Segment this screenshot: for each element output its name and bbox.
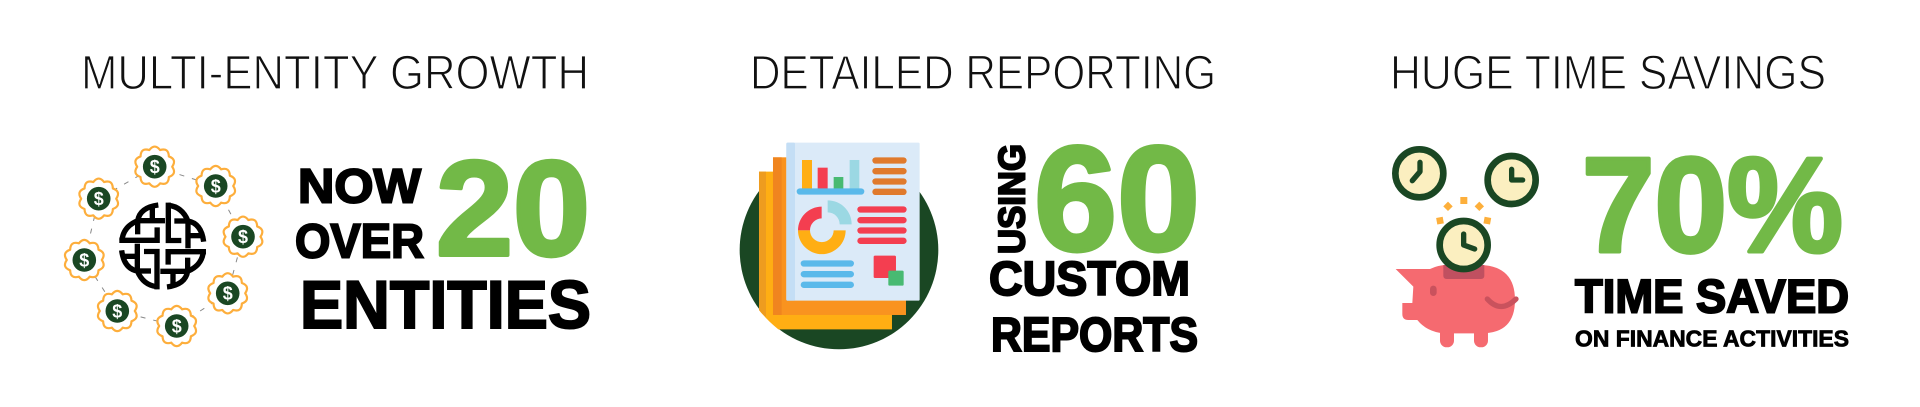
coin 8: $ [94,189,104,209]
text: on finance activities: ON FINANCE ACTIVITIES [1575,326,1849,352]
icon: entity network [59,142,268,351]
coin 2 [191,161,241,211]
coin 4 [203,269,253,318]
coin 1 [130,142,180,191]
coin 7: $ [79,250,89,270]
coin 5 [152,301,202,351]
coin 2: $ [211,176,221,196]
icon: celtic knot [119,203,206,289]
orange text lines [872,157,907,195]
blue text lines [801,260,854,288]
heading: huge time savings: HUGE TIME SAVINGS [1390,47,1826,100]
stat: 70 percent: 70% [1582,130,1843,280]
text: now: NOW [298,160,422,214]
front sheet [786,143,920,301]
text: using: USING [992,144,1032,254]
sparkle marks [1436,197,1491,225]
dashed connections [84,167,243,326]
icon: piggy bank with clocks [1395,149,1536,347]
backdrop circle [740,151,938,349]
red text lines [857,206,907,244]
text: custom: CUSTOM [989,253,1190,306]
donut chart [798,200,852,254]
text: time saved: TIME SAVED [1575,270,1849,322]
clock: top right [1488,156,1536,204]
coin 3 [218,212,268,261]
clock: falling into slot [1440,221,1488,269]
middle sheet [773,157,906,315]
heading: multi-entity growth: MULTI-ENTITY GROWTH [81,47,589,100]
icon: report stack [740,143,938,349]
stat: 20: 20 [436,133,590,284]
panel: multi-entity growth [59,47,591,351]
overlapping squares [874,256,904,286]
piggy bank [1396,265,1516,347]
coin 3: $ [238,227,248,247]
coin 8 [74,174,124,223]
panel: detailed reporting [740,47,1216,362]
coin 6: $ [112,301,122,321]
stat: 60: 60 [1034,115,1200,282]
back sheet [759,172,892,329]
clock: top left [1395,149,1443,197]
panel: huge time savings [1390,47,1849,352]
text: over: OVER [295,216,424,268]
coin 1: $ [150,157,160,177]
heading: detailed reporting: DETAILED REPORTING [750,47,1216,100]
coin 4: $ [223,284,233,304]
text: reports: REPORTS [991,309,1198,362]
text: entities: ENTITIES [300,267,591,343]
coin 5: $ [172,316,182,336]
coin 6 [92,286,142,336]
bar chart [797,160,864,195]
coin 7 [59,235,109,285]
